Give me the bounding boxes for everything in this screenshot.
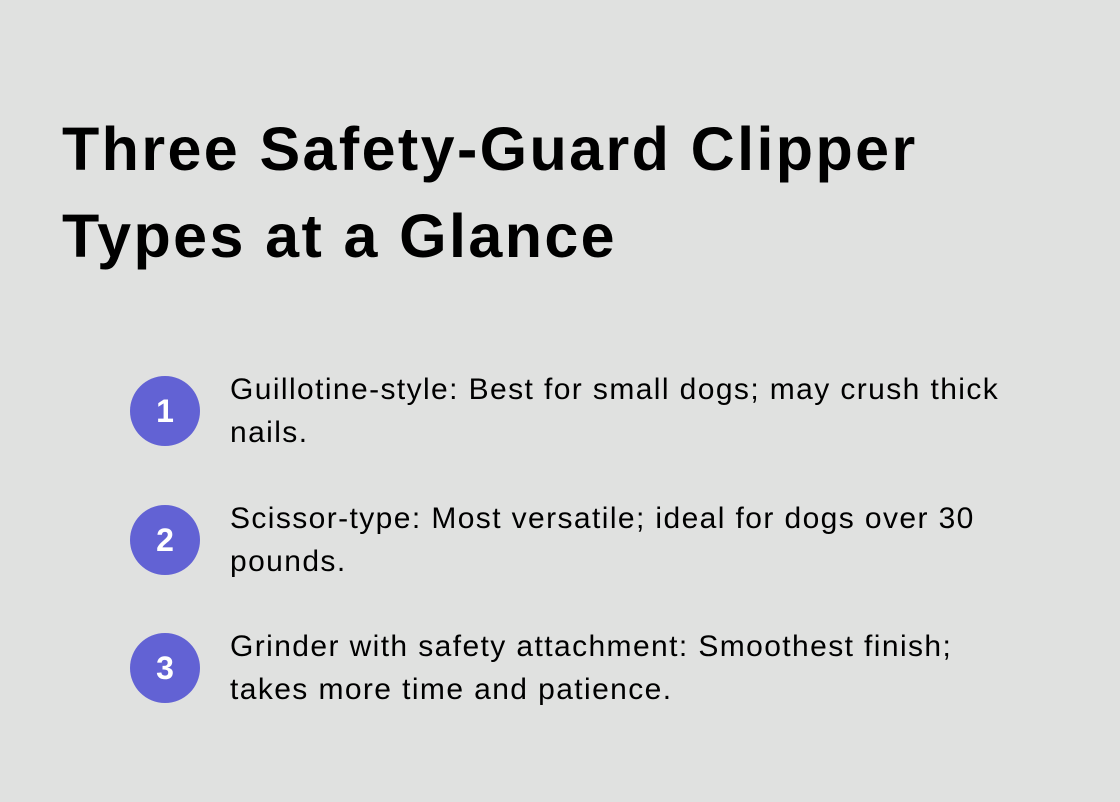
text 3: takes more time and patience. [230, 673, 672, 706]
icon: number 1 [130, 376, 200, 446]
text 3 [230, 630, 952, 706]
title [62, 115, 918, 270]
icon: number 2: 2 [156, 522, 174, 558]
icon: number 1: 1 [156, 393, 174, 429]
text 2: pounds. [230, 545, 347, 578]
text 2 [230, 502, 975, 578]
title: Three Safety-Guard Clipper [62, 115, 918, 183]
text 3: Grinder with safety attachment: Smoothest finish; [230, 630, 952, 663]
title: Types at a Glance [62, 202, 617, 270]
text 1: nails. [230, 416, 308, 449]
item 3 [130, 630, 952, 706]
text 1 [230, 373, 999, 449]
text 2: Scissor-type: Most versatile; ideal for dogs over 30 [230, 502, 975, 535]
item 2 [130, 502, 975, 578]
icon: number 3: 3 [156, 650, 174, 686]
item 1 [130, 373, 999, 449]
icon: number 3 [130, 633, 200, 703]
text 1: Guillotine-style: Best for small dogs; may crush thick [230, 373, 999, 406]
icon: number 2 [130, 505, 200, 575]
